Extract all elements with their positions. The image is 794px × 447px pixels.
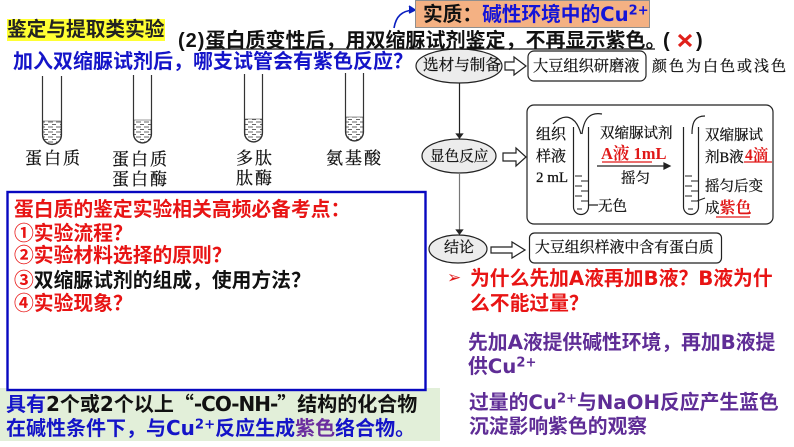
result: 摇匀后变 (705, 178, 763, 194)
tube label 2: 蛋白质 (112, 150, 169, 169)
tube labels: 蛋白质 (25, 149, 82, 168)
node: colour reaction: 显色反应 (430, 149, 488, 165)
essence callout: 实质：碱性环境中的Cu2+ (423, 3, 649, 26)
answer 1: 供Cu2+ (468, 355, 536, 378)
node: conclusion: 结论 (444, 240, 474, 256)
title: 鉴定与提取类实验 (7, 18, 164, 41)
question: 加入双缩脲试剂后，哪支试管会有紫色反应？ (13, 49, 413, 73)
answer 2: 沉淀影响紫色的观察 (469, 415, 647, 438)
icon: cross (679, 35, 691, 46)
point 2: ②实验材料选择的原则？ (14, 239, 232, 268)
key points (14, 193, 350, 316)
flow chart connectors and shapes (416, 49, 773, 263)
statement: (2)蛋白质变性后，用双缩脲试剂鉴定，不再显示紫色。 (178, 30, 665, 52)
point 1: ①实验流程？ (14, 217, 133, 246)
tube label 3: 多肽 (236, 149, 274, 168)
note: 颜色为白色或浅色 (652, 59, 788, 75)
point 3: ③双缩脲试剂的组成，使用方法？ (14, 264, 311, 293)
reagent B: 双缩脲试 (705, 128, 763, 144)
reagent A: 双缩脲试剂 (600, 126, 672, 142)
reagent B: 剂B液 (705, 150, 744, 166)
tube label 3 (236, 149, 274, 188)
node: preparation: 选材与制备 (423, 57, 501, 74)
bottom definition band (0, 388, 440, 441)
closing bracket: ) (696, 30, 703, 52)
sample label: 组织 (536, 127, 566, 143)
heading: 蛋白质的鉴定实验相关高频必备考点： (14, 193, 350, 222)
conclusion text: 大豆组织样液中含有蛋白质 (535, 240, 714, 256)
sample label: 样液 (536, 148, 566, 164)
sample label (536, 126, 568, 186)
definition line 2: 在碱性条件下，与Cu2+反应生成紫色络合物。 (6, 416, 415, 440)
opening bracket: ( (663, 30, 670, 52)
answer 1 (468, 331, 775, 378)
right question (470, 267, 773, 315)
colourless: 无色 (598, 199, 627, 215)
flow labels (423, 56, 788, 256)
tube label 3: 肽酶 (236, 169, 274, 188)
tube label 4: 氨基酸 (326, 149, 383, 168)
result (705, 178, 763, 216)
test tubes (42, 73, 364, 144)
reagent B (705, 127, 763, 166)
right question marker: ➢ (447, 268, 461, 288)
answer 2: 过量的Cu2+与NaOH反应产生蓝色 (469, 391, 779, 414)
arrow: to essence callout (394, 6, 415, 28)
red underlines (602, 162, 772, 217)
step box text: 大豆组织研磨液 (533, 58, 639, 75)
sample label: 2 mL (536, 170, 568, 186)
definition line 1: 具有2个或2个以上“-CO-NH-”结构的化合物 (6, 388, 417, 417)
reagent B amount: 4滴 (745, 147, 768, 164)
right question: 为什么先加A液再加B液？B液为什 (470, 267, 773, 290)
answer 1: 先加A液提供碱性环境，再加B液提 (468, 331, 775, 354)
answer 2 (469, 391, 779, 438)
evidence box (8, 192, 426, 390)
reagent A amount: A液 1mL (601, 144, 667, 163)
tube label 2: 蛋白酶 (112, 170, 169, 189)
point 4: ④实验现象？ (14, 287, 133, 316)
underline of sentence (205, 48, 655, 50)
right question: 么不能过量？ (470, 292, 589, 315)
tube label 2 (112, 150, 169, 189)
shake: 摇匀 (621, 171, 650, 187)
result: 成紫色 (705, 200, 752, 216)
